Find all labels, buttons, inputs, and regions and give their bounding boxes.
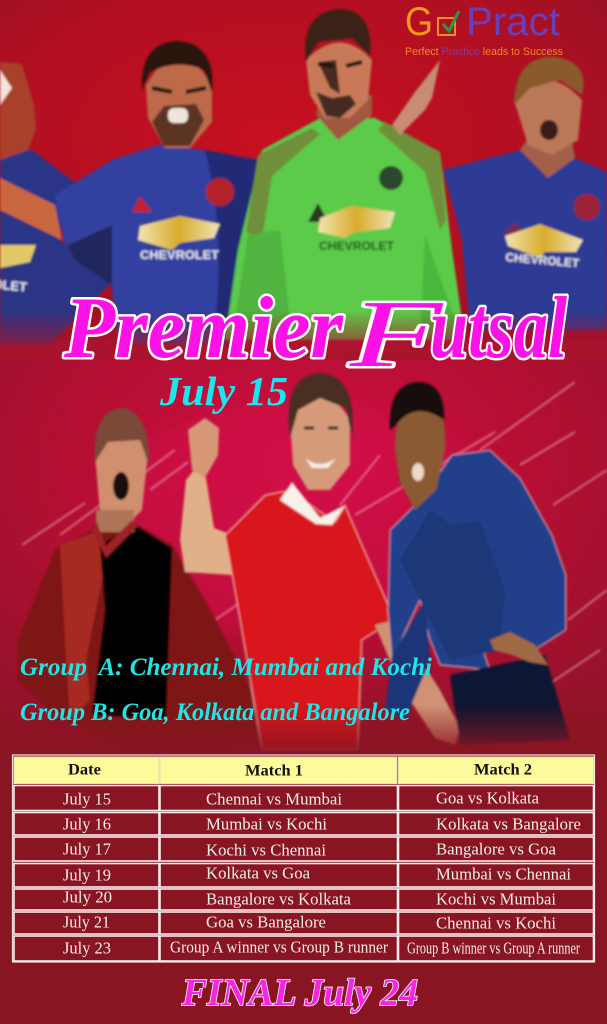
match 2 column: Mumbai vs Chennai — [436, 864, 571, 884]
player: left in red and black — [18, 408, 265, 745]
match 1 column — [170, 790, 388, 956]
match 2 column: Bangalore vs Goa — [436, 840, 557, 858]
speed streaks — [22, 382, 607, 690]
player: centre-left in blue — [55, 41, 258, 345]
table header row — [14, 757, 594, 784]
title: Premier Futsal — [63, 280, 567, 387]
date column — [63, 790, 112, 958]
match 1 column: Group A winner vs Group B runner — [170, 938, 388, 956]
photo: bottom row players — [18, 373, 570, 750]
match 2 column: Chennai vs Kochi — [436, 914, 556, 932]
sponsor marks on shirts: CHEVROLET — [505, 250, 580, 270]
player: far right — [392, 57, 607, 330]
logo word Pract: Pract — [466, 0, 560, 44]
logo letter G: G — [405, 0, 433, 44]
title: Premier Futsal: Premier — [63, 280, 344, 377]
date column: July 21 — [63, 912, 110, 932]
table header row: Date — [68, 762, 101, 778]
match 2 column: Kochi vs Mumbai — [436, 890, 556, 908]
table header row: Match 1 — [245, 762, 303, 780]
icon: green check in box — [438, 11, 459, 35]
match 1 column: Bangalore vs Kolkata — [206, 890, 352, 908]
date: July 15: July 15 — [159, 368, 288, 414]
table header row: Match 2 — [474, 762, 532, 778]
sponsor marks on shirts: CHEVROLET — [140, 248, 220, 262]
match 1 column: Mumbai vs Kochi — [206, 814, 327, 834]
date column: July 15 — [63, 790, 111, 808]
table grid lines — [14, 786, 594, 961]
date column: July 16 — [63, 814, 111, 834]
date column: July 20 — [63, 888, 112, 906]
player: centre in red shirt — [180, 373, 460, 750]
fixtures table — [12, 755, 594, 962]
photo: top row players — [0, 9, 607, 345]
match 2 column: Goa vs Kolkata — [436, 788, 540, 808]
footer: final date: FINAL July 24 — [181, 972, 418, 1014]
match 1 column: Goa vs Bangalore — [206, 912, 326, 932]
date column: July 17 — [63, 840, 111, 858]
title: Premier Futsal: F — [348, 280, 444, 387]
text: group B: Group B: Goa, Kolkata and Bangalore — [20, 699, 410, 726]
match 2 column — [407, 788, 581, 958]
player: right in navy — [385, 382, 570, 745]
vignette under player feet — [0, 705, 607, 757]
match 1 column: Kolkata vs Goa — [206, 864, 311, 882]
text: group A: Group A: Chennai, Mumbai and Kochi — [20, 654, 432, 681]
date column: July 23 — [63, 938, 111, 958]
date column: July 19 — [63, 866, 111, 884]
player: far left — [0, 62, 112, 345]
match 1 column: Kochi vs Chennai — [206, 840, 326, 860]
player: goalkeeper in green — [225, 9, 465, 340]
title: Premier Futsal: utsal — [430, 280, 567, 377]
match 2 column: Kolkata vs Bangalore — [436, 814, 581, 834]
fade between photos — [0, 310, 607, 360]
sponsor marks on shirts — [138, 206, 583, 270]
sponsor marks on shirts: CHEVROLET — [319, 239, 395, 253]
logo: Go Pract — [405, 0, 563, 58]
logo tagline: Perfect Practice leads to Success — [405, 46, 563, 58]
match 1 column: Chennai vs Mumbai — [206, 790, 342, 808]
